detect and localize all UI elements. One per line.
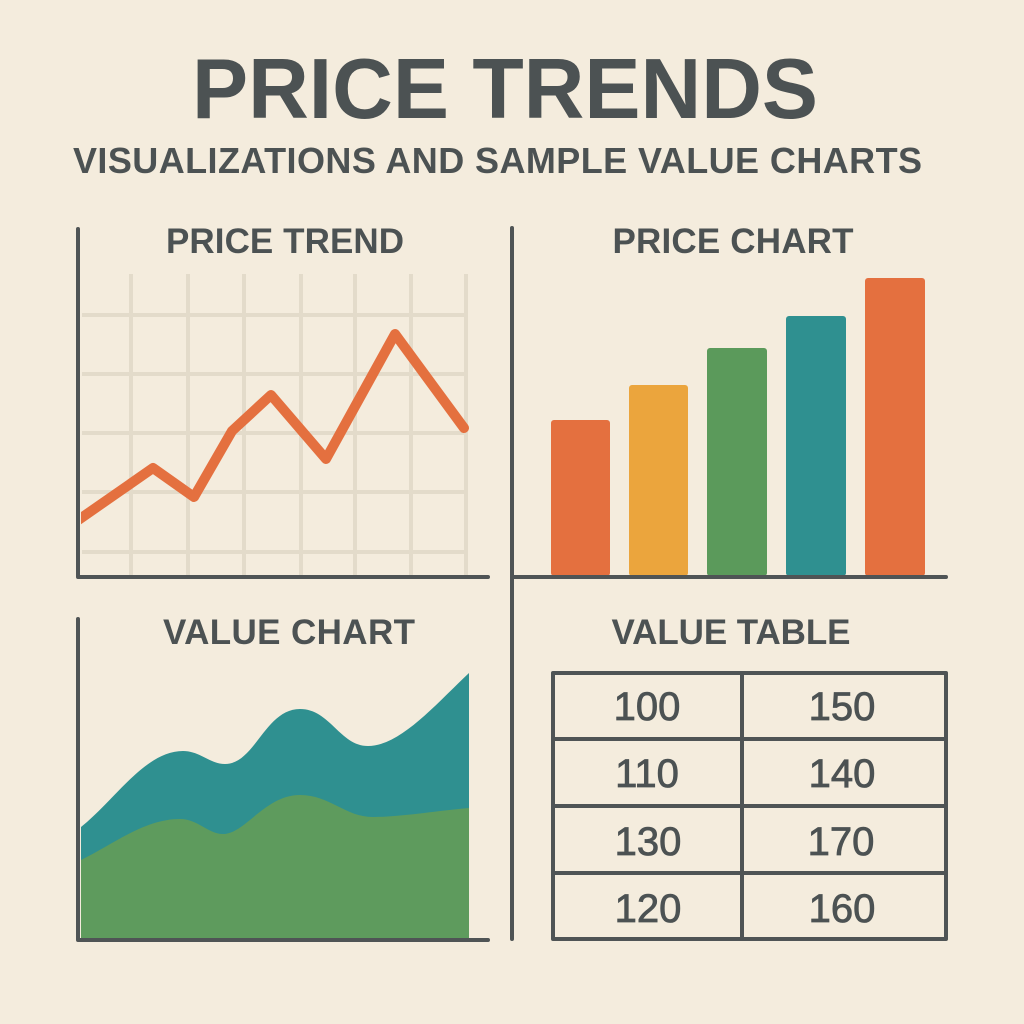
table values: 160 xyxy=(809,887,875,931)
table grid xyxy=(553,673,946,939)
axes xyxy=(78,619,488,940)
table values: 100 xyxy=(614,685,680,729)
line chart xyxy=(74,334,464,523)
panel: price trend xyxy=(74,222,488,577)
table values: 170 xyxy=(808,820,874,864)
table values: 140 xyxy=(809,752,875,796)
axes xyxy=(512,228,946,939)
bar chart xyxy=(551,278,925,576)
table values: 130 xyxy=(615,820,681,864)
heading: value table: VALUE TABLE xyxy=(612,613,850,652)
panel: price chart xyxy=(512,222,946,939)
table values: 120 xyxy=(615,887,681,931)
table values xyxy=(614,685,875,931)
table values: 150 xyxy=(809,685,875,729)
panel: value chart xyxy=(78,613,488,940)
panel: value table xyxy=(553,613,946,939)
title: PRICE TRENDS xyxy=(192,42,818,137)
subtitle: VISUALIZATIONS AND SAMPLE VALUE CHARTS xyxy=(73,140,922,181)
table values: 110 xyxy=(615,752,679,796)
heading: price trend: PRICE TREND xyxy=(166,222,404,261)
axes xyxy=(78,229,488,577)
heading: price chart: PRICE CHART xyxy=(612,222,854,261)
area chart: teal xyxy=(81,673,469,938)
area chart: green xyxy=(81,795,469,938)
heading: value chart: VALUE CHART xyxy=(163,613,415,652)
